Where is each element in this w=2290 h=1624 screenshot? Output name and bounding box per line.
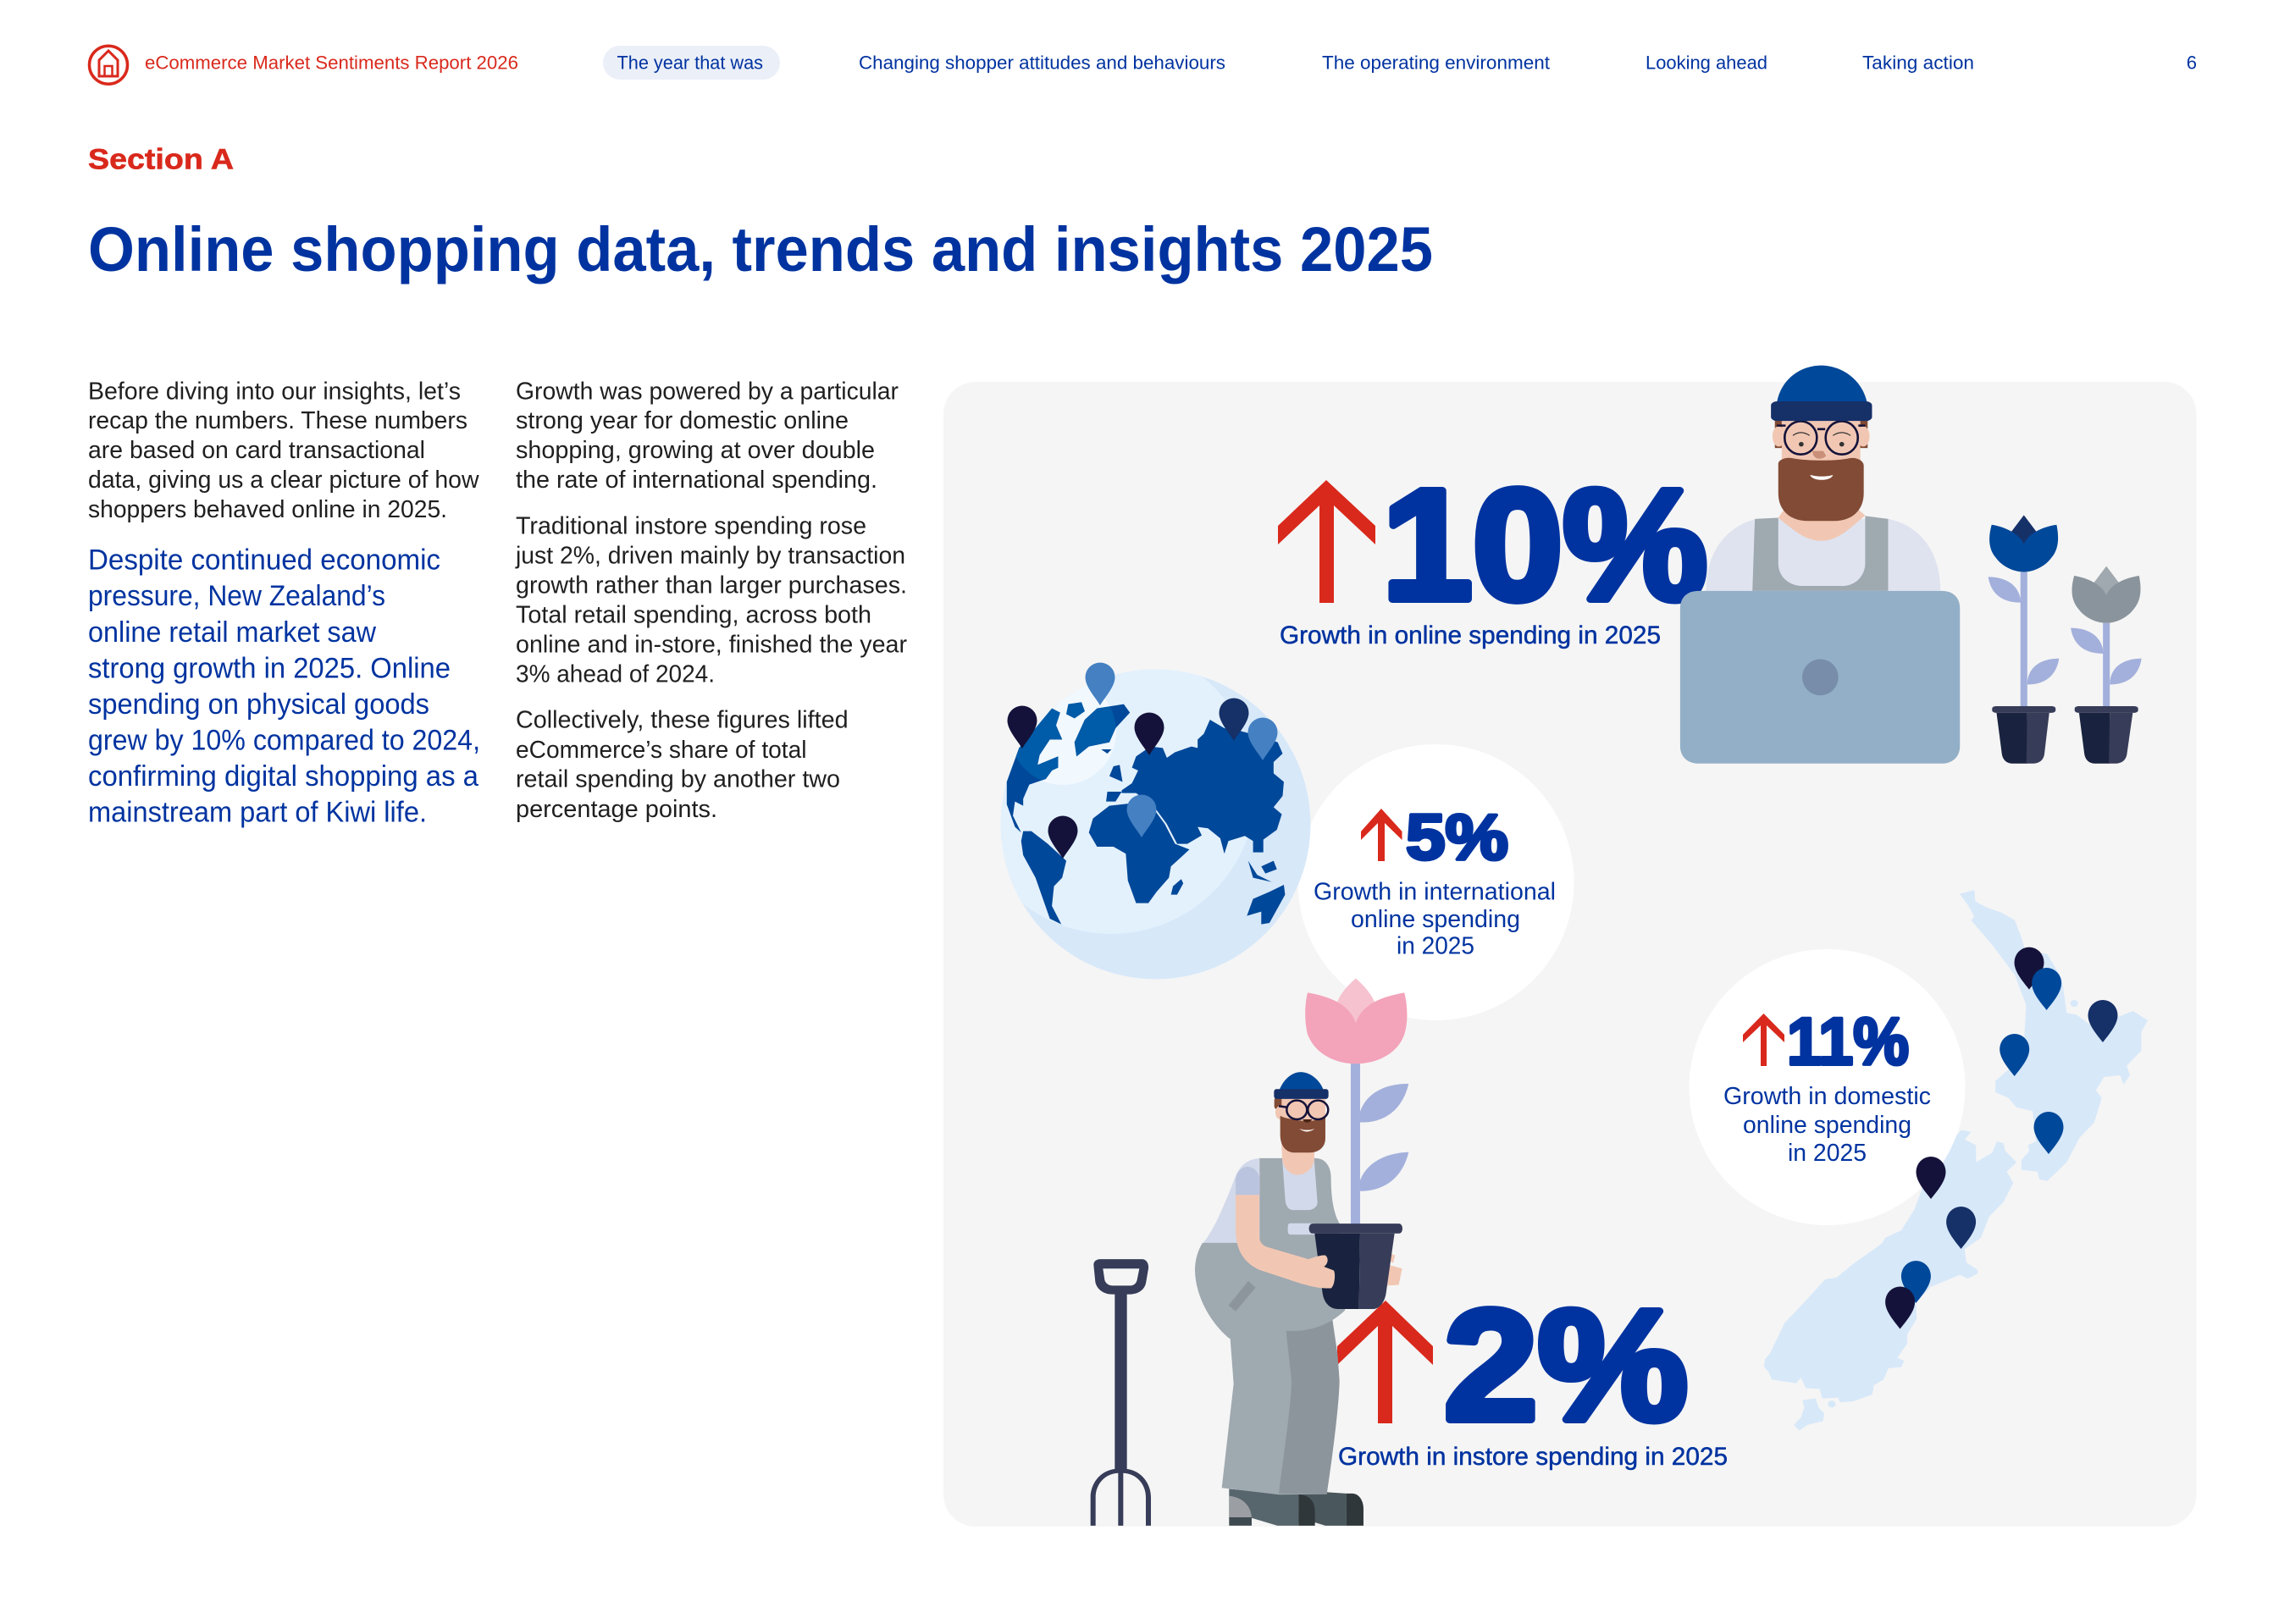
plant pot <box>1309 1224 1402 1309</box>
text block: column two, eCommerce share <box>516 707 849 823</box>
value 11%: 11% <box>1787 1003 1909 1079</box>
illustration: blue flower in pot <box>1989 515 2059 764</box>
caption: online spending <box>1743 1112 1911 1139</box>
active nav pill <box>603 46 780 80</box>
text block: blue lead paragraph: online retail market saw <box>88 616 376 649</box>
text block: column two, instore spending: growth rather than larger purchases. <box>516 572 907 599</box>
nose <box>1812 451 1826 459</box>
nav item: Looking ahead <box>1646 52 1767 73</box>
face <box>1782 420 1861 463</box>
text block: column two, eCommerce share: percentage points. <box>516 796 717 823</box>
caption: Growth in international <box>1314 879 1556 906</box>
hair and ears <box>1773 419 1870 448</box>
hat <box>1771 366 1872 421</box>
text block: intro: recap the numbers. These numbers <box>88 407 467 434</box>
text block: intro: Before diving into our insights, let’s <box>88 378 461 405</box>
caption: in 2025 <box>1397 933 1474 960</box>
neck <box>1778 508 1865 541</box>
pink flower head <box>1305 978 1407 1063</box>
report name: eCommerce Market Sentiments Report 2026 <box>145 52 518 73</box>
text block: blue lead paragraph: pressure, New Zealand’s <box>88 580 385 612</box>
overalls <box>1752 516 1888 591</box>
caption: online spending <box>1351 906 1520 933</box>
text block: column two, instore spending: Total retail spending, across both <box>516 601 871 628</box>
glasses <box>1279 1101 1328 1119</box>
text block: column two, domestic growth: Growth was powered by a particular <box>516 378 899 405</box>
caption <box>1314 879 1556 960</box>
map pins <box>1008 662 1277 859</box>
text block: blue lead paragraph: confirming digital shopping as a <box>88 760 478 793</box>
stat: 10% online growth <box>1278 457 1707 649</box>
smile <box>1810 475 1833 480</box>
caption <box>1723 1083 1931 1167</box>
text block: column two, instore spending <box>515 513 907 688</box>
caption: Growth in instore spending in 2025 <box>1338 1443 1728 1471</box>
nav item: The operating environment <box>1322 52 1550 73</box>
text block: column two, eCommerce share: retail spending by another two <box>516 766 840 793</box>
text block: column two, instore spending: 3% ahead of 2024. <box>516 661 715 688</box>
shirt <box>1706 519 1940 591</box>
text block: blue lead paragraph: mainstream part of Kiwi life. <box>88 797 427 829</box>
chest shirt <box>1282 1158 1318 1210</box>
garden fork <box>1091 1259 1151 1526</box>
text block: column two, domestic growth: the rate of international spending. <box>516 467 877 494</box>
header bar <box>90 46 2197 84</box>
text block: intro: are based on card transactional <box>88 437 425 464</box>
arrow up <box>1337 1301 1433 1423</box>
continents <box>1007 702 1285 925</box>
belt loop <box>1288 1224 1316 1235</box>
beard <box>1778 458 1864 521</box>
illustration: man with laptop <box>1680 366 1960 764</box>
neck <box>1281 1142 1314 1175</box>
nav item: Changing shopper attitudes and behaviours <box>859 52 1225 73</box>
laptop <box>1680 591 1960 764</box>
section label: Section A <box>88 143 234 175</box>
hat <box>1274 1072 1329 1099</box>
text block: blue lead paragraph: spending on physical goods <box>88 688 429 721</box>
overalls body <box>1195 1158 1345 1339</box>
value 5%: 5% <box>1406 802 1508 874</box>
eyes <box>1799 442 1845 446</box>
logo icon: house in ring <box>90 46 127 84</box>
value 10%: 10% <box>1382 457 1707 633</box>
New Zealand map pins <box>1885 947 2117 1329</box>
illustration: man holding flower with fork <box>1091 978 1408 1526</box>
text block: column two, instore spending: just 2%, driven mainly by transaction <box>515 543 905 570</box>
text block: blue lead paragraph <box>88 544 480 829</box>
head <box>1275 1097 1325 1152</box>
stat: 2% instore growth <box>1337 1279 1728 1471</box>
trouser legs <box>1222 1320 1340 1494</box>
value 2%: 2% <box>1444 1279 1688 1453</box>
highlight land <box>1016 702 1116 781</box>
arm and hand <box>1236 1195 1335 1289</box>
far hand <box>1387 1253 1402 1285</box>
flower stem and leaves <box>1351 1063 1408 1225</box>
caption: Growth in domestic <box>1723 1083 1931 1110</box>
eyebrows <box>1793 433 1850 435</box>
text block: intro: data, giving us a clear picture of how <box>88 467 480 494</box>
text block: blue lead paragraph: Despite continued economic <box>88 544 440 577</box>
nav item: Taking action <box>1862 52 1974 73</box>
boots <box>1229 1489 1363 1526</box>
active nav pill: The year that was <box>617 52 763 73</box>
illustration: grey flower in pot <box>2071 566 2142 764</box>
stat circle: 11% domestic <box>1689 949 1965 1225</box>
text block: column two, instore spending: Traditional instore spending rose <box>516 513 866 540</box>
text block: blue lead paragraph: grew by 10% compared to 2024, <box>88 725 480 757</box>
page number: 6 <box>2187 52 2197 73</box>
text block: intro: shoppers behaved online in 2025. <box>88 496 447 523</box>
caption: Growth in online spending in 2025 <box>1280 621 1661 649</box>
panel: infographic background <box>943 382 2197 1527</box>
arrow up <box>1361 809 1402 861</box>
text block: blue lead paragraph: strong growth in 2025. Online <box>88 652 451 684</box>
text block: column two, instore spending: online and in-store, finished the year <box>516 632 907 659</box>
globe sphere <box>1001 669 1311 979</box>
pocket <box>1229 1281 1256 1312</box>
sleeve <box>1236 1167 1259 1195</box>
text block: column two, domestic growth: strong year for domestic online <box>516 407 849 434</box>
arrow up <box>1743 1014 1784 1066</box>
back shirt <box>1203 1158 1259 1244</box>
text block: column two, domestic growth <box>516 378 899 494</box>
illustration: New Zealand map <box>1764 890 2148 1431</box>
glasses <box>1777 421 1865 455</box>
page title: Online shopping data, trends and insights 2025 <box>88 214 1433 284</box>
text block: intro <box>88 378 480 523</box>
text block: column two, eCommerce share: eCommerce’s share of total <box>516 737 806 764</box>
illustration: globe with pins <box>1001 662 1311 979</box>
arrow up <box>1278 480 1375 603</box>
caption: in 2025 <box>1788 1140 1867 1167</box>
text block: column two, eCommerce share: Collectively, these figures lifted <box>516 707 849 734</box>
text block: column two, domestic growth: shopping, growing at over double <box>516 437 875 464</box>
stat circle: 5% international <box>1297 744 1574 1020</box>
